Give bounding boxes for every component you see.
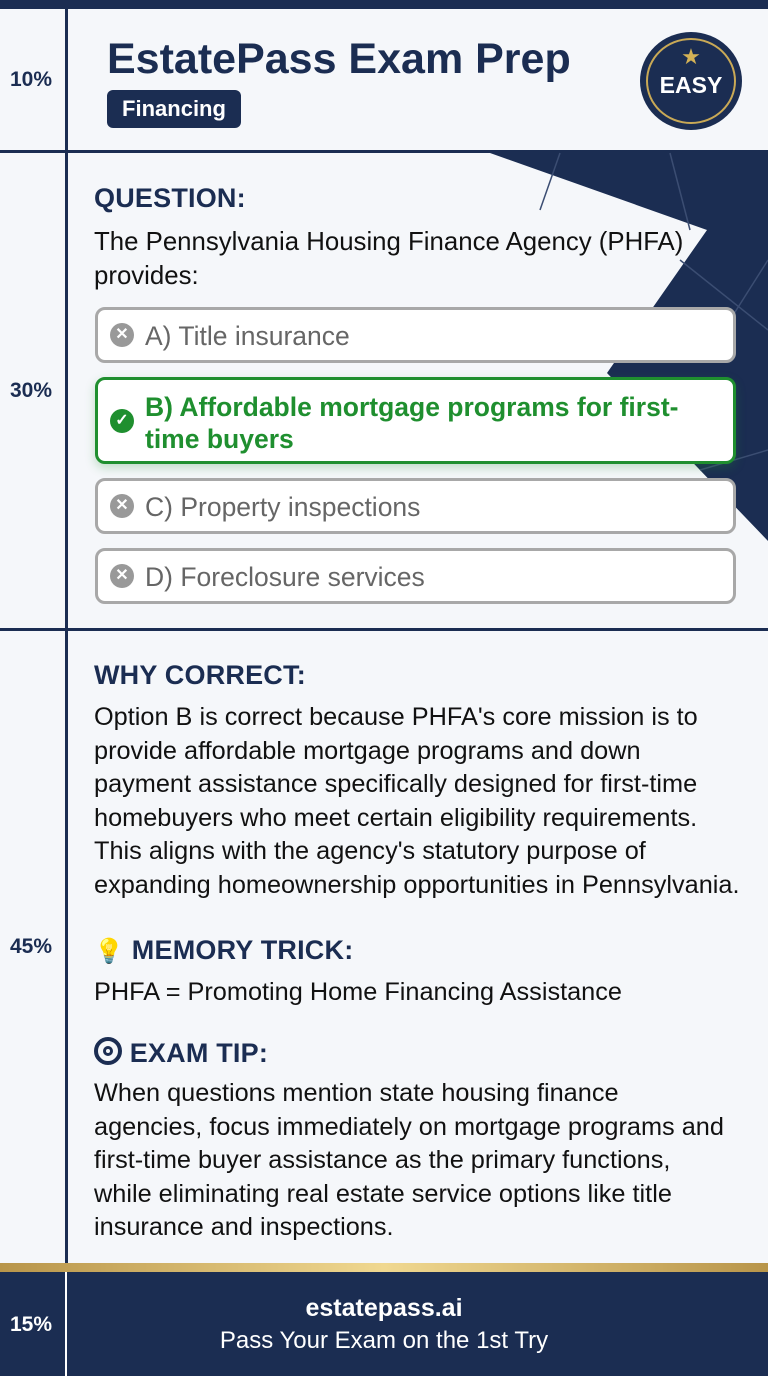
exam tip text: When questions mention state housing finance — [94, 1079, 619, 1107]
badge: EASY: EASY — [660, 72, 722, 98]
label 15%: 15% — [10, 1313, 52, 1336]
option B correct: ✓ — [115, 412, 129, 429]
why correct text: homebuyers who meet certain eligibility requirements. — [94, 804, 697, 832]
badge: EASY — [640, 32, 742, 130]
why correct text: expanding homeownership opportunities in Pennsylvania. — [94, 870, 740, 898]
question text — [94, 228, 683, 290]
option C — [95, 478, 736, 534]
question heading: QUESTION: — [94, 183, 246, 213]
option A: A) Title insurance — [145, 321, 350, 351]
option B correct: B) Affordable mortgage programs for first- — [145, 392, 678, 422]
gold divider — [0, 1263, 768, 1272]
exam tip text — [94, 1079, 724, 1241]
why correct text: provide affordable mortgage programs and down — [94, 736, 641, 764]
memory trick text: PHFA = Promoting Home Financing Assistance — [94, 978, 622, 1006]
top bar — [0, 0, 768, 9]
exam tip heading: EXAM TIP: — [130, 1038, 268, 1068]
footer site: estatepass.ai — [305, 1294, 463, 1322]
option D: D) Foreclosure services — [145, 562, 425, 592]
title: EstatePass Exam Prep — [107, 35, 571, 83]
label 30%: 30% — [10, 379, 52, 402]
exam tip text: agencies, focus immediately on mortgage programs and — [94, 1112, 724, 1140]
exam tip text: insurance and inspections. — [94, 1213, 394, 1241]
question text: provides: — [94, 262, 199, 290]
option C: C) Property inspections — [145, 492, 420, 522]
why correct text: Option B is correct because PHFA's core mission is to — [94, 703, 698, 731]
label 45%: 45% — [10, 935, 52, 958]
tag: Financing — [107, 90, 241, 128]
why correct text — [94, 703, 740, 898]
option D: ✕ — [115, 567, 129, 584]
why correct heading: WHY CORRECT: — [94, 660, 306, 690]
exam tip text: while eliminating real estate service options like title — [94, 1180, 672, 1208]
option D — [95, 548, 736, 604]
option B correct: time buyers — [145, 424, 294, 454]
why correct text: payment assistance specifically designed for first-time — [94, 770, 697, 798]
footer tagline: Pass Your Exam on the 1st Try — [220, 1327, 548, 1354]
option B correct — [95, 377, 736, 464]
question text: The Pennsylvania Housing Finance Agency (PHFA) — [94, 228, 683, 256]
memory trick heading: 💡 MEMORY TRICK: — [94, 935, 353, 965]
footer — [0, 1272, 768, 1376]
option A: ✕ — [115, 326, 129, 343]
label 10%: 10% — [10, 68, 52, 91]
badge: EASY: ★ — [681, 44, 701, 69]
exam tip text: first-time buyer assistance as the primary functions, — [94, 1146, 670, 1174]
option C: ✕ — [115, 497, 129, 514]
why correct text: This aligns with the agency's statutory purpose of — [94, 837, 646, 865]
option A — [95, 307, 736, 363]
tag: Financing: Financing — [122, 96, 226, 121]
